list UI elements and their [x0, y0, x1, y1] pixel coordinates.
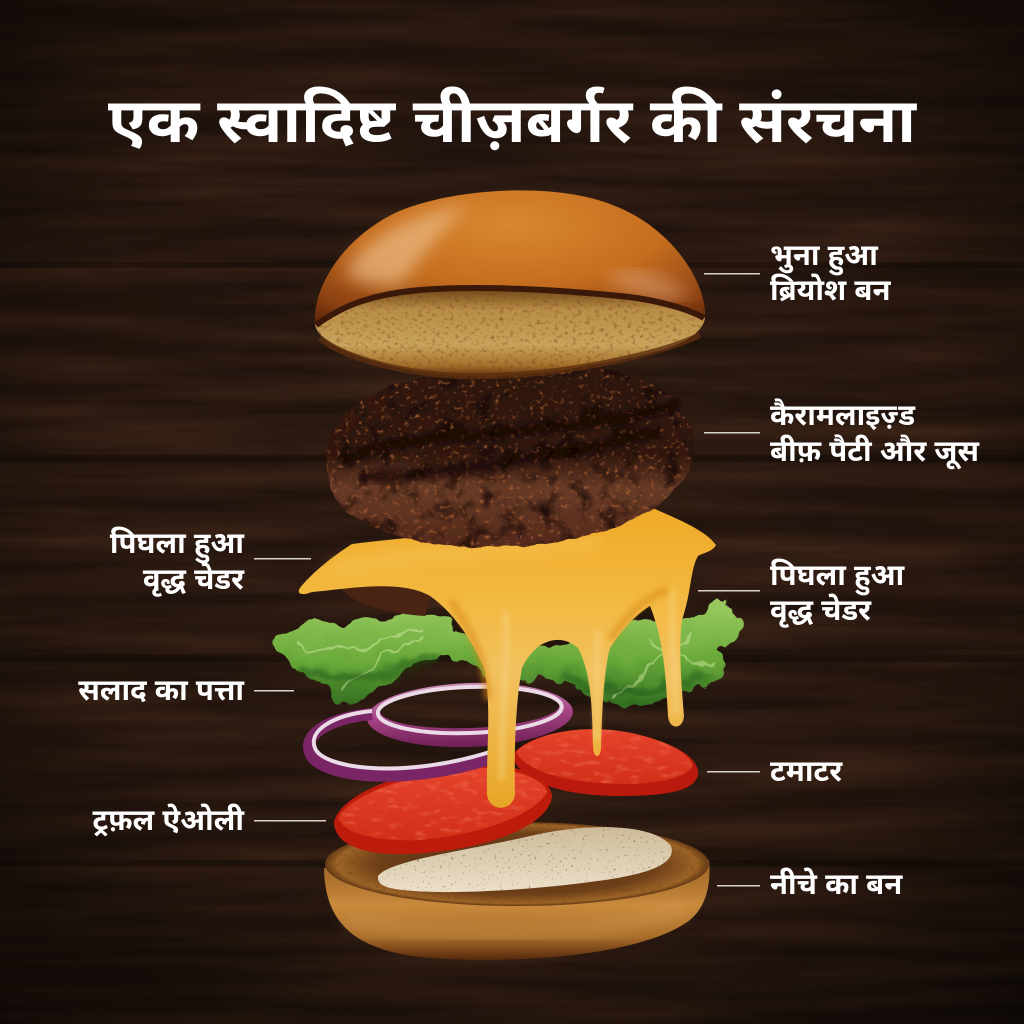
label: lettuce: सलाद का पत्ता [78, 674, 245, 707]
label: cheddar (left): वृद्ध चेडर [143, 562, 245, 597]
onion rings [309, 679, 574, 776]
title: एक स्वादिष्ट चीज़बर्गर की संरचना [108, 86, 918, 156]
tomato right [512, 729, 698, 796]
label: beef patty (right): बीफ़ पैटी और जूस [770, 435, 980, 469]
label: cheddar (right) [698, 559, 906, 628]
label: cheddar (left) [110, 527, 311, 597]
label: top bun (right): ब्रियोश बन [770, 274, 891, 307]
label: cheddar (left): पिघला हुआ [110, 527, 245, 564]
label: beef patty (right): कैरामलाइज़्ड [770, 399, 916, 432]
label: cheddar (right): पिघला हुआ [770, 559, 906, 596]
melted cheddar [299, 506, 716, 808]
beef patty [326, 364, 694, 547]
label: tomato [707, 755, 843, 788]
label: tomato: टमाटर [770, 755, 843, 788]
label: bottom bun: नीचे का बन [770, 867, 903, 901]
truffle aioli [378, 827, 672, 892]
top bun [315, 190, 705, 376]
label: truffle aioli: ट्रफ़ल ऐओली [93, 803, 245, 837]
tomato left [334, 764, 552, 854]
label: beef patty (right) [704, 399, 980, 469]
label: top bun (right) [704, 239, 891, 307]
second patty sliver [338, 581, 432, 616]
lettuce [275, 600, 741, 709]
label: top bun (right): भुना हुआ [770, 239, 879, 276]
illustration: exploded burger [275, 190, 741, 960]
label: cheddar (right): वृद्ध चेडर [770, 593, 872, 628]
bottom bun [324, 822, 710, 960]
